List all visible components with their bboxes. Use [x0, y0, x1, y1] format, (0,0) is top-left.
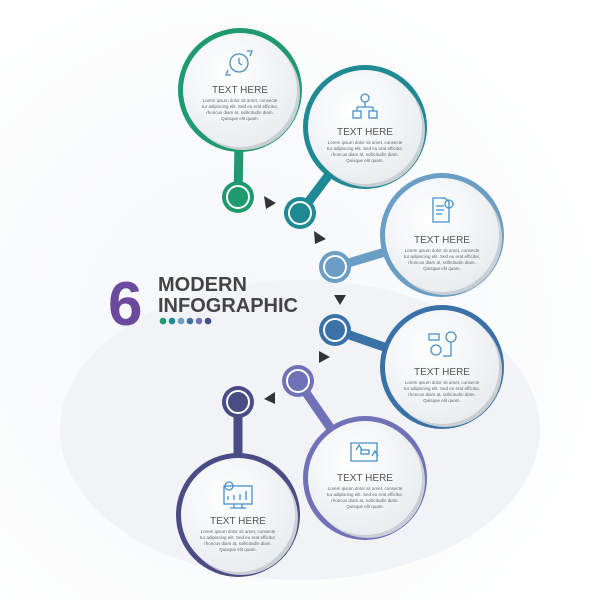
icon: target board [429, 332, 456, 356]
arrows [264, 196, 346, 404]
icon: folder arrows [351, 443, 378, 461]
step 3: tur adipiscing elit. Sed eu erat efficitur, [404, 254, 480, 259]
icon: monitor chart [224, 482, 252, 508]
step 5: tur adipiscing elit. Sed eu erat efficitur, [327, 492, 403, 497]
step 5: Quisque elit quam. [346, 504, 384, 509]
step 6: tur adipiscing elit. Sed eu erat efficitur, [200, 535, 276, 540]
step 1: TEXT HERE [212, 85, 268, 96]
step 2: Lorem ipsum dolor sit amet, consecte [328, 140, 403, 145]
step 3: Quisque elit quam. [423, 266, 461, 271]
step 1: Quisque elit quam. [221, 116, 259, 121]
title [108, 270, 298, 339]
title: INFOGRAPHIC [158, 295, 298, 317]
step 2: Quisque elit quam. [346, 158, 384, 163]
step 5: Lorem ipsum dolor sit amet, consecte [328, 486, 403, 491]
icon: document [433, 198, 453, 222]
step 4 [319, 305, 504, 429]
title: 6 [108, 270, 142, 339]
step 3: rhoncus diam at, sollicitudin diam. [408, 260, 476, 265]
step 1: rhoncus diam at, sollicitudin diam. [206, 110, 274, 115]
step 2: TEXT HERE [337, 127, 393, 138]
step 6: Lorem ipsum dolor sit amet, consecte [201, 529, 276, 534]
step 1: tur adipiscing elit. Sed eu erat efficitur, [202, 104, 278, 109]
step 6: Quisque elit quam. [219, 547, 257, 552]
step 6 [176, 386, 300, 577]
step 4: Lorem ipsum dolor sit amet, consecte [405, 380, 480, 385]
step 4: tur adipiscing elit. Sed eu erat efficitur, [404, 386, 480, 391]
step 3: Lorem ipsum dolor sit amet, consecte [405, 248, 480, 253]
step 6: rhoncus diam at, sollicitudin diam. [204, 541, 272, 546]
title: MODERN [158, 274, 247, 296]
icon: network [353, 94, 377, 118]
step 4: rhoncus diam at, sollicitudin diam. [408, 392, 476, 397]
step 2 [284, 65, 427, 229]
step 4: TEXT HERE [414, 367, 470, 378]
dots [160, 318, 211, 324]
step 5: rhoncus diam at, sollicitudin diam. [331, 498, 399, 503]
step 1 [178, 28, 302, 213]
world map backdrop [60, 280, 540, 580]
step 1: Lorem ipsum dolor sit amet, consecte [203, 98, 278, 103]
step 6: TEXT HERE [210, 516, 266, 527]
icon: clock arrows [226, 51, 252, 75]
step 3: TEXT HERE [414, 235, 470, 246]
step 5 [282, 365, 427, 540]
step 3 [319, 173, 504, 297]
step 2: tur adipiscing elit. Sed eu erat efficitur, [327, 146, 403, 151]
step 2: rhoncus diam at, sollicitudin diam. [331, 152, 399, 157]
step 5: TEXT HERE [337, 473, 393, 484]
step 4: Quisque elit quam. [423, 398, 461, 403]
